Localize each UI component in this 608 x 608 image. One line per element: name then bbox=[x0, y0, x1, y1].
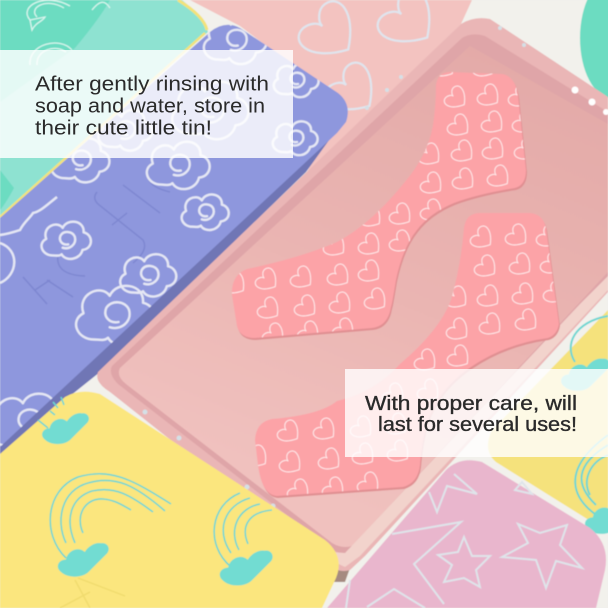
yellow tin right bbox=[488, 310, 608, 534]
mint tin top left bbox=[0, 0, 208, 218]
callout: proper care: last for several uses! bbox=[378, 414, 577, 436]
callout: rinsing bbox=[0, 50, 293, 158]
rim dots bbox=[572, 86, 608, 115]
callout: proper care bbox=[345, 369, 608, 457]
icon: clouds bbox=[42, 413, 273, 585]
rim paint chips bbox=[142, 26, 526, 542]
shadow under tray corner bbox=[325, 560, 350, 582]
rainbow with cloud bbox=[38, 397, 272, 567]
callout: proper care: With proper care, will bbox=[365, 393, 577, 415]
callout: rinsing: After gently rinsing with bbox=[35, 74, 269, 96]
eye patch upper bbox=[232, 72, 528, 340]
pink tin top centre with hearts bbox=[190, 0, 472, 177]
shadow gap beside tray bbox=[0, 125, 340, 456]
periwinkle tin with clouds bbox=[0, 17, 348, 451]
eye patch lower bbox=[243, 213, 570, 506]
callout: rinsing: their cute little tin! bbox=[35, 118, 212, 140]
callout: rinsing: soap and water, store in bbox=[35, 96, 265, 118]
pink star tin bbox=[327, 460, 606, 608]
yellow tin bottom left bbox=[0, 392, 339, 608]
mint disc top right bbox=[580, 0, 608, 98]
embossed lettering bbox=[23, 183, 170, 304]
pink tray bbox=[97, 18, 608, 571]
